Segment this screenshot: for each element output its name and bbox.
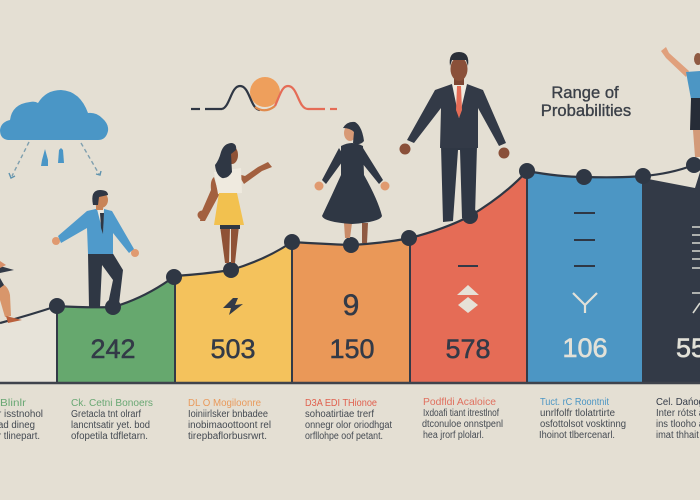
text block: column 2: lancntsatir yet. bod <box>71 420 150 431</box>
text block: column 4: orfllohpe oof petant. <box>305 431 383 442</box>
number: green value: 242 <box>90 334 136 364</box>
figure: tall man in dark suit <box>400 52 510 222</box>
text block: column 4 <box>305 397 392 442</box>
icon: lightning bolt <box>223 298 243 315</box>
text block: column 5: Ixdoafi tiant itrestlnof <box>423 408 499 419</box>
figure: woman in dark dress <box>314 122 390 243</box>
text block: column 6 <box>539 396 626 441</box>
heading: Range of Probabilities: Range of <box>551 83 619 102</box>
stepped probability chart <box>0 165 700 383</box>
text block: column 5: hea jrorf plolarl. <box>423 430 484 441</box>
panel: red segment <box>410 171 527 383</box>
text block: column 2: Gretacla tnt olrarf <box>71 409 141 420</box>
panel: dark segment <box>643 172 700 383</box>
text block: column 6: unrlfolfr tlolatrtirte <box>540 408 615 419</box>
panel: left blank segment <box>0 306 57 383</box>
number: orange value: 150 <box>329 334 375 364</box>
figure: man in blue jacket <box>52 190 139 307</box>
text block: column 2 <box>71 397 153 442</box>
chart nodes <box>49 157 700 315</box>
figure: woman with raised arm at right edge <box>661 47 700 157</box>
text block: column 6: Ihoinot tlbercenarl. <box>539 430 615 441</box>
icon: chevron <box>573 293 597 313</box>
heading: Range of Probabilities <box>541 83 631 120</box>
heading: Range of Probabilities: Probabilities <box>541 101 631 120</box>
number: nine: 9 <box>343 289 359 322</box>
text block: column 5: dtconuloe onnstpenl <box>422 419 503 430</box>
text block: column 1: Blinlr <box>0 397 27 409</box>
text block: column 6: Tuct. rC Roontnit <box>540 396 609 408</box>
text block: column 2: ofopetila tdfletarn. <box>71 431 148 442</box>
panel: green segment <box>57 276 175 383</box>
icon: probability wave <box>191 77 337 110</box>
figure: seated person at left edge <box>0 261 22 323</box>
text block: column 1 <box>0 397 43 442</box>
text block: column 2: Ck. Cetni Bonoers <box>71 397 153 409</box>
text block: column 7 <box>656 396 700 441</box>
number: yellow value: 503 <box>210 334 256 364</box>
icon: dark segment ticks <box>692 227 700 313</box>
icon: rain cloud <box>0 90 108 178</box>
number: red value: 578 <box>445 334 491 364</box>
text block: column 3: tirepbaflorbusrwrt. <box>188 431 267 442</box>
text block: column 3: inobimaoottoont rel <box>188 420 271 431</box>
text block: column 3 <box>188 397 271 442</box>
icon: diamonds <box>457 285 479 313</box>
panel: blue segment <box>527 171 643 383</box>
number: blue value: 106 <box>562 333 608 363</box>
text block: column 4: onnegr olor oriodhgat <box>305 420 392 431</box>
text block: column 4: sohoatirtiae trerf <box>305 409 374 420</box>
text block: column 4: D3A EDI THionoe <box>305 397 377 409</box>
text block: column 5 <box>422 396 503 441</box>
text block: column 5: Podfldi Acaloice <box>423 396 496 408</box>
text block: column 3: DL O Mogiloonre <box>188 397 261 409</box>
icon: blue segment dashes <box>574 213 595 266</box>
text block: column 3: Ioiniirlsker bnbadee <box>188 409 268 420</box>
icon: red segment dash <box>458 265 478 267</box>
panel: yellow segment <box>175 242 292 383</box>
text block: column 6: osfottolsot vosktinng <box>540 419 626 430</box>
figure: woman in yellow skirt <box>198 143 272 263</box>
panel: orange segment <box>292 238 410 383</box>
